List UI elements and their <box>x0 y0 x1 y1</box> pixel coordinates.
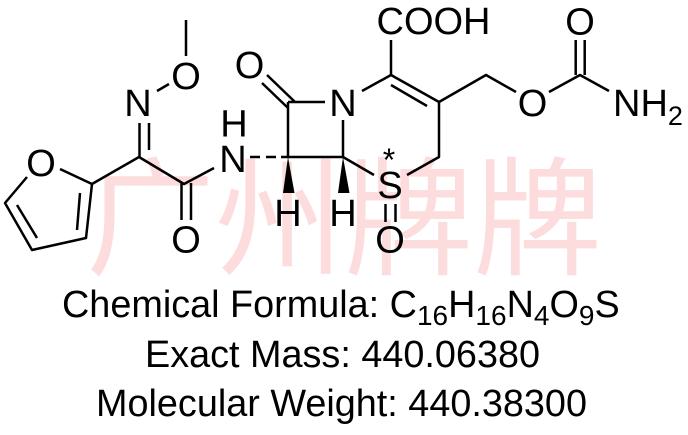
label: amide nitrogen: N <box>219 139 247 181</box>
chemical formula: 9 <box>579 300 594 331</box>
chemical formula: N <box>507 284 534 326</box>
carboxylic acid group: COOH <box>376 1 490 43</box>
label: ester oxygen: O <box>518 83 547 125</box>
label: carbonyl oxygen: O <box>565 2 595 44</box>
chemical formula: 16 <box>417 300 448 331</box>
label: sulfoxide oxygen: O <box>375 220 405 262</box>
chemical formula: O <box>549 284 579 326</box>
carbamate side chain <box>439 2 683 131</box>
carboxylic acid group <box>376 1 490 75</box>
chemical formula: 16 <box>475 300 507 331</box>
chemical formula: S <box>594 284 620 326</box>
molecular weight: Molecular Weight: 440.38300 <box>96 383 587 425</box>
chemical formula <box>62 284 620 331</box>
stereo wedges and hydrogens: H <box>329 193 357 235</box>
label: furan oxygen: O <box>26 143 56 185</box>
label: methoxy oxygen: O <box>171 56 201 98</box>
label: lactam oxygen: O <box>235 45 264 87</box>
chemical formula: 4 <box>534 300 549 331</box>
dihydrothiazine ring <box>343 75 439 262</box>
furan ring <box>5 143 92 250</box>
label: imine nitrogen: N <box>124 83 152 125</box>
label: amide oxygen: O <box>171 220 201 262</box>
label: amine: NH <box>613 83 668 125</box>
label: sulfur: S <box>377 165 403 207</box>
stereo wedges and hydrogens <box>274 157 357 235</box>
chemical formula: H <box>448 284 475 326</box>
methoxyimino group <box>92 20 201 184</box>
amide group <box>139 104 289 262</box>
stereo wedges and hydrogens: H <box>274 193 302 235</box>
chemical formula: Chemical Formula: C <box>62 284 417 326</box>
label: amine: 2 <box>668 101 683 131</box>
label: lactam nitrogen: N <box>329 83 357 125</box>
label: amide NH: H <box>220 104 248 146</box>
watermark: 广州牌牌 <box>86 149 602 293</box>
label: chiral asterisk: * <box>383 142 395 178</box>
exact mass: Exact Mass: 440.06380 <box>145 334 540 376</box>
beta-lactam ring <box>235 45 357 157</box>
